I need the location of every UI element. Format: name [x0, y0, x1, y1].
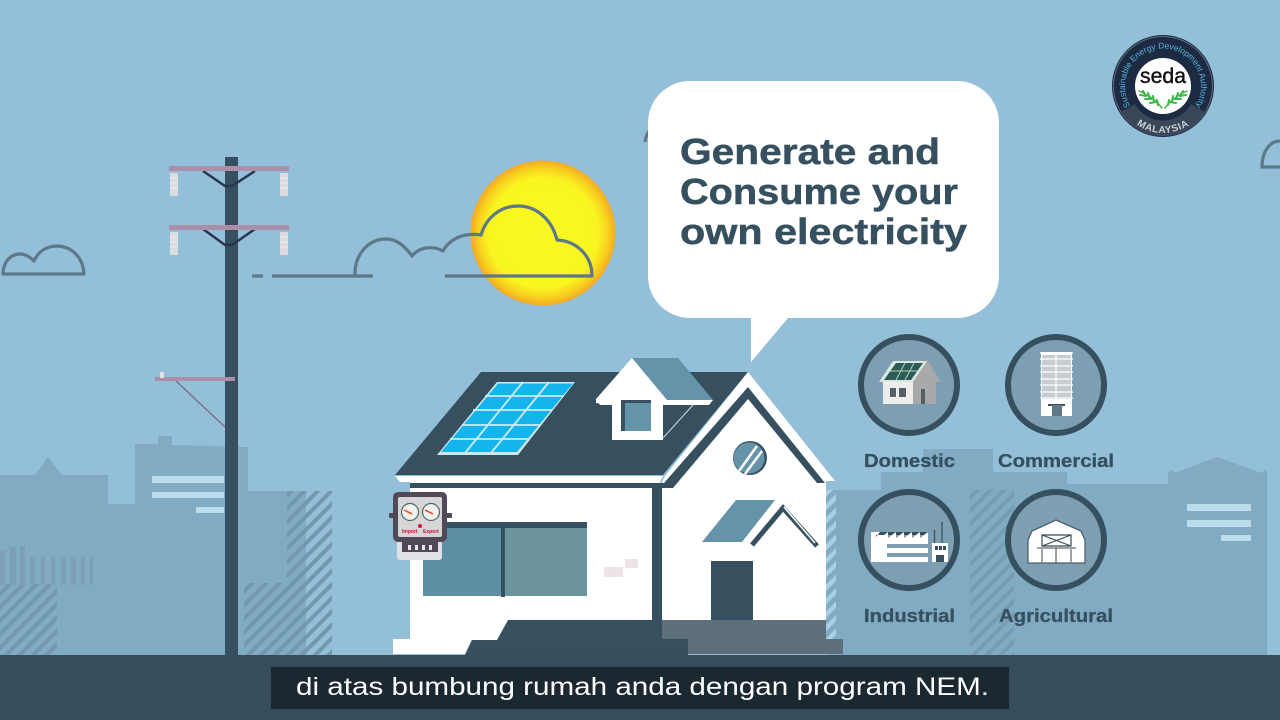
outline cloud: top right edge — [1262, 141, 1280, 167]
electric meter: Export — [423, 529, 439, 535]
bubble heading: Consume your — [680, 171, 958, 212]
solar panel — [437, 382, 575, 455]
logo malaysia text: MALAYSIA — [1137, 119, 1189, 133]
left white steps — [393, 620, 508, 654]
icon circle: commercial — [1008, 337, 1104, 433]
dormer — [596, 358, 713, 440]
bubble heading: own electricity — [680, 211, 967, 252]
door awning — [702, 500, 775, 542]
icon circle: industrial — [861, 492, 957, 588]
gable dark trim — [410, 387, 825, 488]
icon circle: domestic — [861, 337, 957, 433]
round window — [733, 441, 767, 475]
main wall — [410, 482, 660, 640]
house — [393, 358, 843, 655]
grey steps — [662, 620, 843, 654]
hatch beside house — [826, 490, 836, 640]
drain pipe — [652, 483, 662, 620]
speech bubble — [648, 81, 999, 362]
label: industrial: Industrial — [864, 605, 955, 626]
logo leaves — [1139, 91, 1187, 108]
icon circle: agricultural — [1008, 492, 1104, 588]
electric meter: Import — [402, 529, 418, 535]
category: domestic — [861, 337, 957, 471]
right city skyline — [826, 449, 1267, 655]
left city skyline — [0, 436, 332, 655]
electric meter — [389, 492, 452, 560]
bottom bar — [0, 655, 1280, 720]
label: domestic: Domestic — [864, 450, 955, 471]
awning chevron — [752, 507, 817, 546]
logo wordmark: seda — [1140, 65, 1186, 88]
label: agricultural: Agricultural — [999, 605, 1113, 626]
outline cloud fragment behind bubble — [645, 128, 652, 142]
seda logo — [1112, 35, 1214, 137]
bubble heading — [680, 131, 967, 252]
front path — [465, 620, 688, 655]
door — [711, 561, 753, 620]
dashes of horizon line — [252, 274, 340, 278]
category: commercial — [998, 337, 1114, 471]
electricity pole — [155, 157, 289, 655]
outline cloud: far left — [3, 246, 84, 274]
outline cloud in front of sun — [340, 206, 592, 276]
front gable wall — [662, 372, 835, 620]
caption — [271, 667, 1009, 709]
roof — [395, 372, 748, 475]
logo ring text: Sustainable Energy Development Authority — [1118, 42, 1208, 108]
category: industrial — [861, 492, 957, 626]
large window — [423, 522, 587, 597]
bubble heading: Generate and — [680, 131, 940, 172]
bricks — [604, 559, 638, 577]
category: agricultural — [999, 492, 1113, 626]
label: commercial: Commercial — [998, 450, 1114, 471]
roof eave — [395, 476, 663, 482]
caption: di atas bumbung rumah anda dengan program NEM. — [296, 673, 989, 701]
sun — [470, 160, 616, 306]
